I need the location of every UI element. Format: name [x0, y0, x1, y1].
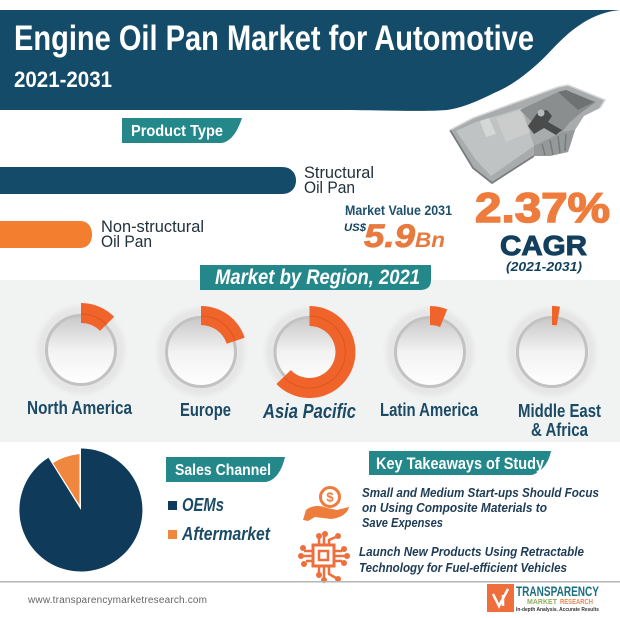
heading tag: key takeaways — [369, 451, 551, 475]
stat: CAGR — [475, 184, 610, 274]
takeaway text: composite materials: Save Expenses — [362, 515, 443, 530]
icon: money in hand: $ — [326, 490, 334, 504]
heading tag: sales channel — [166, 457, 285, 482]
takeaway text: composite materials — [362, 485, 599, 530]
takeaway text: composite materials: on Using Composite Materials to — [362, 500, 547, 515]
legend: aftermarket: Aftermarket — [181, 524, 271, 544]
bar: non-structural oil pan: Non-structural — [101, 217, 204, 236]
donut: North America — [27, 303, 133, 418]
heading tag: product type — [122, 118, 242, 143]
heading tag: sales channel: Sales Channel — [175, 462, 271, 479]
bar: structural oil pan — [0, 163, 374, 197]
header banner — [0, 10, 620, 111]
donut: Asia Pacific — [262, 306, 356, 423]
heading tag: key takeaways: Key Takeaways of Study — [376, 454, 544, 473]
stat: market value 2031: Market Value 2031 — [345, 203, 452, 218]
logo: Transparency Market Research: MARKET — [527, 597, 557, 606]
stat: CAGR: 2.37% — [475, 184, 610, 231]
bar: structural oil pan: Oil Pan — [304, 178, 355, 197]
takeaway text: retractable technology — [359, 544, 584, 575]
pie chart: sales channel — [19, 448, 142, 571]
donut: Europe — [157, 306, 245, 420]
donut: Latin America: Latin America — [380, 400, 479, 420]
icon: money in hand — [303, 488, 349, 521]
stat: market value 2031 — [344, 203, 452, 254]
takeaway text: composite materials: Small and Medium Start-ups Should Focus — [362, 485, 599, 500]
stat: CAGR: CAGR — [500, 230, 587, 261]
bar: non-structural oil pan: Oil Pan — [101, 232, 152, 251]
icon: microchip — [298, 531, 350, 583]
donut: Middle East and Africa: Middle East — [518, 401, 601, 421]
bar: structural oil pan: Structural — [304, 163, 374, 182]
heading tag: market by region: Market by Region, 2021 — [215, 266, 420, 289]
donut: Europe: Europe — [180, 400, 231, 420]
image: engine oil pan — [450, 85, 605, 183]
donut: Latin America — [380, 306, 479, 420]
legend: OEMs — [168, 495, 224, 515]
panel: market by region — [0, 265, 620, 442]
donut: Middle East and Africa: & Africa — [531, 420, 589, 440]
logo: Transparency Market Research — [487, 583, 599, 613]
subtitle years: 2021-2031 — [14, 67, 112, 92]
stat: market value 2031: US$ — [344, 222, 367, 234]
takeaway text: retractable technology: Launch New Products Using Retractable — [359, 544, 584, 559]
donut: North America: North America — [27, 398, 133, 418]
donut: Middle East and Africa — [508, 306, 601, 440]
heading tag: product type: Product Type — [131, 123, 223, 140]
logo: Transparency Market Research: In-depth Analysis. Accurate Results — [516, 607, 599, 613]
stat: market value 2031: Bn — [415, 229, 445, 252]
takeaway text: retractable technology: Technology for Fuel-efficient Vehicles — [359, 560, 567, 575]
logo: Transparency Market Research: RESEARCH — [560, 597, 593, 606]
stat: market value 2031: 5.9 — [364, 218, 415, 254]
stat: CAGR: (2021-2031) — [506, 259, 582, 274]
donut: Asia Pacific: Asia Pacific — [262, 401, 356, 423]
footer website url: www.transparencymarketresearch.com — [27, 595, 207, 606]
legend: OEMs: OEMs — [182, 495, 224, 515]
bar: non-structural oil pan — [0, 217, 204, 251]
